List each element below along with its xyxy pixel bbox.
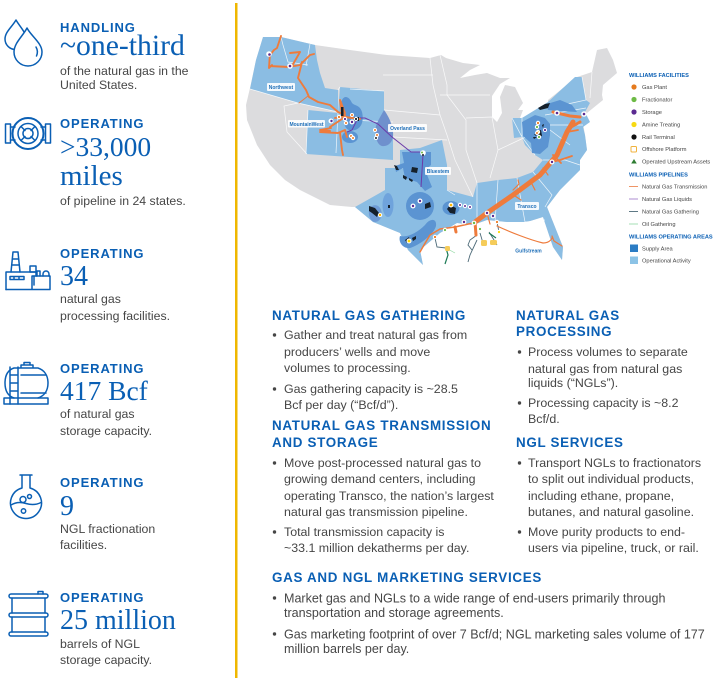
legend: natural gas liquids: Natural Gas Liquids (642, 197, 692, 203)
map label: MountainWest: MountainWest (289, 122, 324, 128)
section: natural gas processing: Processing capacity is ~8.2 (528, 396, 679, 410)
section: natural gas gathering: volumes to processing. (284, 361, 411, 375)
icon: factory (6, 252, 50, 290)
map label: Northwest (267, 83, 295, 91)
map label: Bluestem (425, 167, 451, 175)
legend: supply area: Supply Area (642, 246, 674, 252)
legend: storage (631, 109, 662, 116)
legend: fractionator (631, 97, 672, 104)
stat: processing facilities: 34 (60, 261, 88, 292)
stat: pipeline miles: >33,000 (60, 131, 151, 162)
section: natural gas processing: NATURAL GAS (516, 308, 620, 323)
stat: barrels storage (9, 590, 176, 667)
section: natural gas processing: Bcf/d. (528, 412, 560, 426)
section: NGL services: NGL SERVICES (516, 435, 624, 450)
stat: handling one-third: HANDLING (60, 20, 136, 35)
icon: flask (10, 475, 41, 518)
map: United States operations (246, 36, 617, 265)
section: natural gas gathering: Gather and treat natural gas from (284, 328, 467, 342)
section: natural gas transmission and storage: NATURAL GAS TRANSMISSION (272, 418, 491, 433)
section: natural gas transmission and storage: AND STORAGE (272, 435, 378, 450)
stat: storage capacity: storage capacity. (60, 424, 152, 438)
section: natural gas gathering: Bcf per day (“Bcf/d”). (284, 398, 398, 412)
stat: storage capacity: OPERATING (60, 361, 144, 376)
legend: gas plant (631, 84, 667, 91)
legend: amine treating: Amine Treating (642, 122, 680, 128)
section: natural gas processing: PROCESSING (516, 324, 612, 339)
section: gas and NGL marketing services: Market gas and NGLs to a wide range of end-users primarily through (284, 592, 665, 606)
stat: pipeline miles: of pipeline in 24 states. (60, 194, 186, 208)
legend: natural gas gathering: Natural Gas Gathering (642, 210, 699, 216)
legend: storage: Storage (642, 110, 662, 116)
section: gas and NGL marketing services: transportation and storage agreements. (284, 606, 504, 620)
stat: handling one-third (5, 20, 189, 92)
stat: handling one-third: ~one-third (60, 30, 185, 62)
section: NGL services: Move purity products to end- (528, 525, 685, 539)
legend: WILLIAMS OPERATING AREAS (629, 234, 713, 240)
stat: barrels storage: storage capacity. (60, 653, 152, 667)
stat: barrels storage: 25 million (60, 605, 176, 636)
stat: pipeline miles (6, 116, 186, 208)
legend: rail terminal (631, 134, 675, 141)
stat: fractionation facilities: 9 (60, 491, 74, 522)
section: natural gas gathering (272, 308, 467, 412)
section: NGL services: including ethane, propane, (528, 489, 674, 503)
stat: processing facilities: natural gas (60, 292, 121, 306)
stat: handling one-third: United States. (60, 78, 137, 92)
divider: vertical gold rule (235, 3, 238, 678)
section: natural gas gathering: producers’ wells and move (284, 345, 430, 359)
facilities: rail terminals (341, 103, 550, 243)
section: natural gas processing (516, 308, 688, 426)
map label: Overland Pass (388, 124, 427, 132)
icon: pipeline valve (6, 118, 50, 149)
section: natural gas transmission and storage: Total transmission capacity is (284, 525, 444, 539)
legend: natural gas transmission: Natural Gas Transmission (642, 184, 707, 190)
section: natural gas transmission and storage: natural gas transmission pipeline. (284, 505, 468, 519)
legend: operated upstream assets: Operated Upstream Assets (642, 160, 710, 166)
pipeline: natural gas liquids (347, 118, 423, 187)
section: gas and NGL marketing services: Gas marketing footprint of over 7 Bcf/d; NGL marketing sales volume of 177 (284, 628, 705, 642)
section: gas and NGL marketing services (272, 570, 705, 656)
facilities: plant markers (266, 51, 587, 251)
section: NGL services: butanes, and natural gasoline. (528, 505, 694, 519)
stat: processing facilities: processing facilities. (60, 309, 170, 323)
stat: barrels storage: barrels of NGL (60, 637, 140, 651)
section: natural gas processing: liquids (“NGLs”). (528, 376, 618, 390)
legend: operational activity (630, 256, 691, 264)
stat: storage capacity: of natural gas (60, 407, 135, 421)
legend: offshore platform: Offshore Platform (642, 147, 687, 153)
section: gas and NGL marketing services: GAS AND NGL MARKETING SERVICES (272, 570, 542, 585)
stat: processing facilities (6, 246, 170, 323)
map label: Transco: Transco (517, 204, 537, 210)
section: natural gas processing: Process volumes to separate (528, 345, 688, 359)
section: natural gas processing: natural gas from natural gas (528, 362, 682, 376)
legend: operational activity: Operational Activity (642, 258, 691, 264)
map label: Bluestem: Bluestem (427, 169, 450, 175)
map label: Overland Pass: Overland Pass (390, 126, 425, 132)
map label: Transco (515, 202, 539, 210)
land: contiguous US base (246, 37, 617, 265)
area: supply (341, 97, 577, 248)
section: natural gas transmission and storage: ~33.1 million dekatherms per day. (284, 541, 469, 555)
section: NGL services: to split out individual products, (528, 472, 694, 486)
section: natural gas transmission and storage: growing demand centers, including (284, 472, 476, 486)
section: natural gas gathering: NATURAL GAS GATHERING (272, 308, 466, 323)
stat: fractionation facilities (10, 475, 155, 552)
stat: pipeline miles: miles (60, 160, 123, 192)
stat: pipeline miles: OPERATING (60, 116, 144, 131)
stat: fractionation facilities: NGL fractionation (60, 522, 155, 536)
legend: WILLIAMS FACILITIES (629, 73, 689, 79)
map label: Gulfstream (513, 246, 544, 254)
icon: water drops (5, 20, 42, 66)
legend: rail terminal: Rail Terminal (642, 135, 675, 141)
legend: fractionator: Fractionator (642, 98, 672, 104)
stat: storage capacity (4, 361, 152, 438)
section: natural gas transmission and storage: Move post-processed natural gas to (284, 456, 481, 470)
stat: fractionation facilities: facilities. (60, 538, 107, 552)
stat: barrels storage: OPERATING (60, 590, 144, 605)
legend: supply area (630, 244, 674, 252)
stat: processing facilities: OPERATING (60, 246, 144, 261)
section: gas and NGL marketing services: million barrels per day. (284, 642, 409, 656)
stat: handling one-third: of the natural gas in the (60, 64, 189, 78)
legend (629, 73, 713, 264)
pipeline: natural gas gathering (435, 222, 499, 262)
section: natural gas transmission and storage: operating Transco, the nation’s largest (284, 489, 494, 503)
state borders (250, 37, 592, 223)
section: NGL services: Transport NGLs to fractionators (528, 456, 701, 470)
stat: storage capacity: 417 Bcf (60, 375, 149, 406)
legend: gas plant: Gas Plant (642, 85, 667, 91)
section: natural gas transmission and storage (272, 418, 494, 555)
icon: barrel (9, 592, 48, 636)
icon: storage tank (4, 362, 48, 404)
section: NGL services (516, 435, 701, 555)
pipeline: oil gathering (445, 233, 496, 264)
stat: fractionation facilities: OPERATING (60, 475, 144, 490)
map label: Northwest: Northwest (269, 85, 294, 91)
section: natural gas gathering: Gas gathering capacity is ~28.5 (284, 382, 458, 396)
area: operational activity (250, 37, 590, 265)
map label: Gulfstream: Gulfstream (515, 248, 542, 254)
pipeline: natural gas transmission (269, 36, 580, 252)
section: NGL services: users via pipeline, truck, or rail. (528, 541, 699, 555)
legend: oil gathering: Oil Gathering (642, 222, 676, 228)
legend: WILLIAMS PIPELINES (629, 172, 688, 178)
